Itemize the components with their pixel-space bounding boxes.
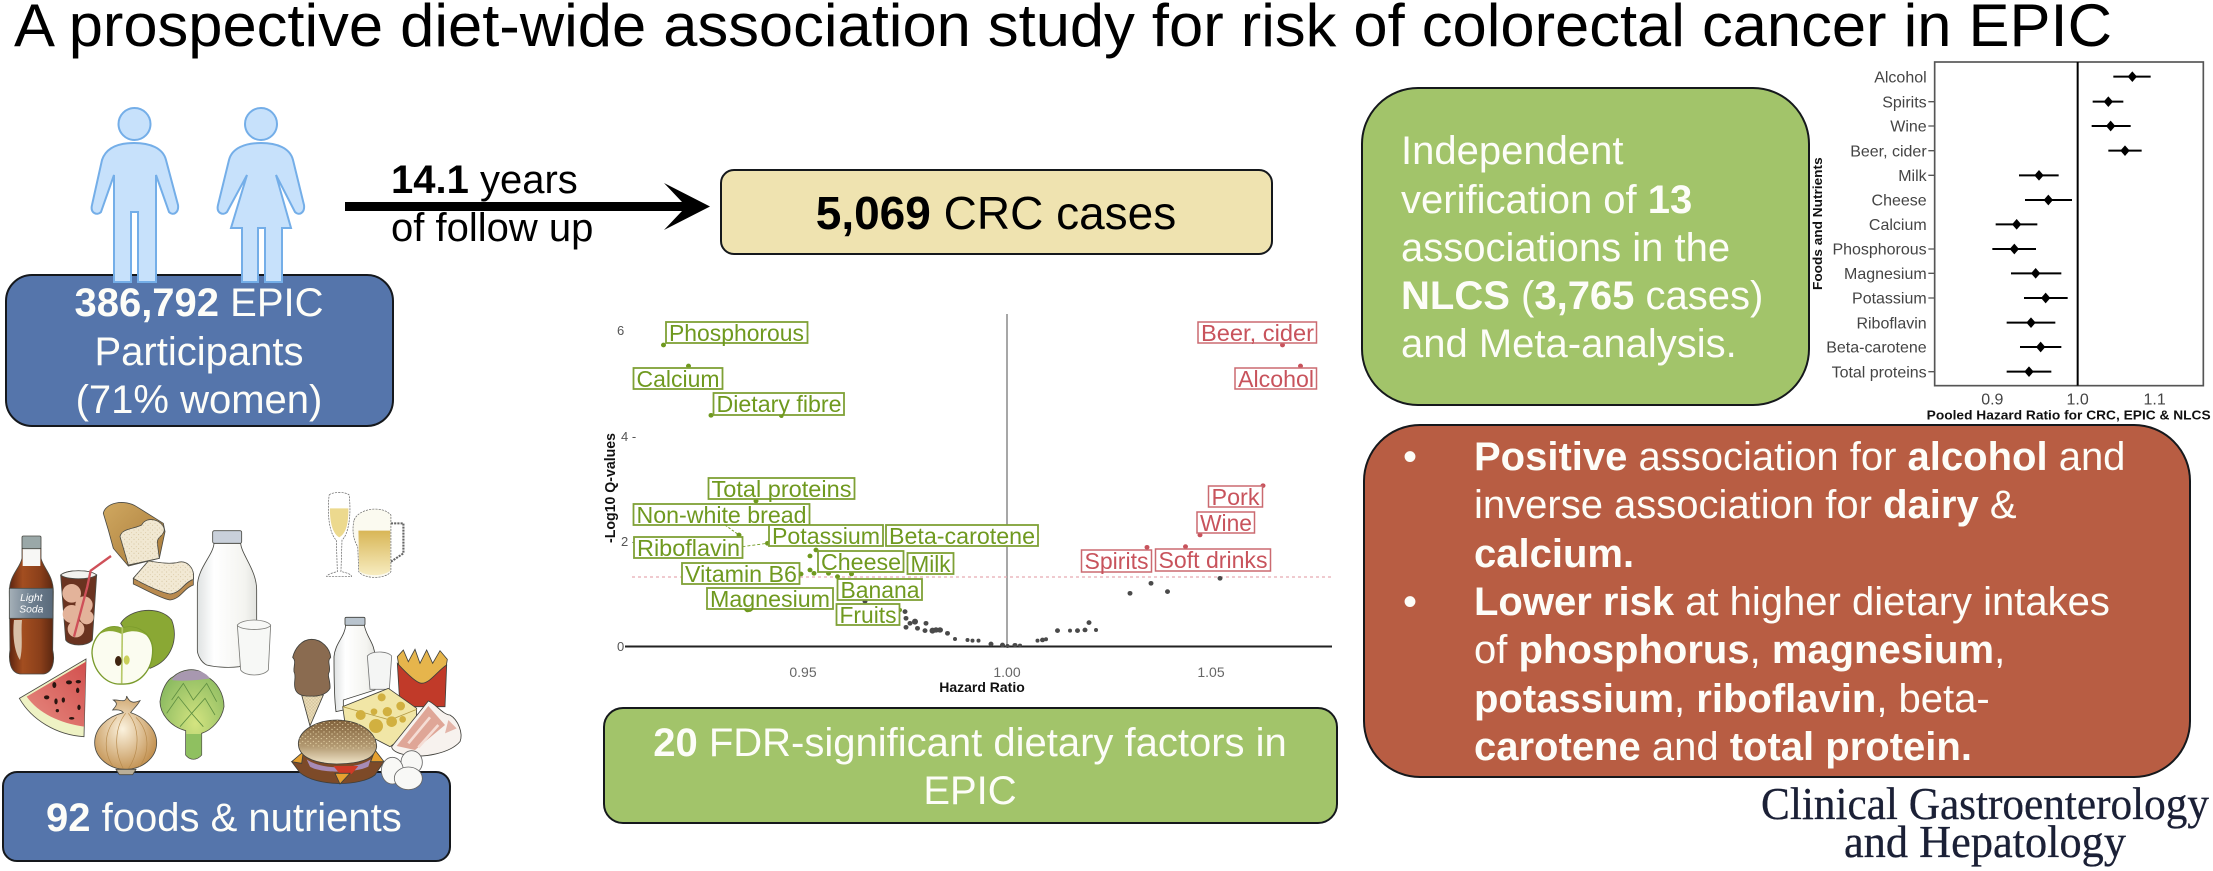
bullet: lower risk: • bbox=[1403, 580, 1417, 624]
icon: cheese bbox=[343, 688, 417, 747]
bullet: lower risk: Lower risk at higher dietary intakes bbox=[1474, 580, 2110, 624]
x-axis ticks bbox=[1981, 392, 2166, 409]
icon: fries bbox=[397, 649, 447, 707]
estimates with confidence intervals bbox=[1992, 71, 2151, 377]
labels: inverse associations: Cheese bbox=[821, 549, 901, 575]
panel: 20 FDR-significant dietary factors bbox=[604, 708, 1337, 823]
icon: beer mug bbox=[353, 509, 403, 577]
icon: ice cream bbox=[293, 639, 331, 726]
labels: inverse associations: Beta-carotene bbox=[889, 523, 1035, 549]
x-axis ticks: 1.00 bbox=[993, 664, 1021, 680]
labels: positive associations: Beer, cider bbox=[1201, 320, 1314, 346]
row ticks bbox=[1928, 102, 1935, 372]
y-axis title: Foods and Nutrients bbox=[1810, 157, 1825, 290]
panel: independent verification: associations in the bbox=[1401, 226, 1730, 270]
panel: EPIC participants: Participants bbox=[95, 330, 303, 374]
y-axis ticks bbox=[617, 323, 636, 654]
labels: positive associations: Alcohol bbox=[1238, 366, 1314, 392]
row labels: Milk bbox=[1898, 168, 1928, 185]
x-axis title: Hazard Ratio bbox=[939, 679, 1025, 695]
row labels: Cheese bbox=[1872, 193, 1927, 210]
row labels: Alcohol bbox=[1874, 69, 1927, 86]
row labels: Potassium bbox=[1852, 291, 1927, 308]
axis lines bbox=[625, 314, 1332, 646]
bullet: alcohol and dairy: Positive association for alcohol and bbox=[1474, 435, 2125, 479]
x-axis title: Pooled Hazard Ratio for CRC, EPIC & NLCS bbox=[1927, 407, 2211, 422]
journal name bbox=[1761, 778, 2209, 867]
text: years of follow up: of follow up bbox=[391, 206, 593, 250]
labels: positive associations: Spirits bbox=[1084, 548, 1148, 574]
labels: inverse associations bbox=[634, 320, 1038, 628]
icon: light soda bottle bbox=[9, 536, 54, 674]
icon: artichoke bbox=[160, 670, 224, 759]
panel: independent verification bbox=[1362, 88, 1809, 405]
labels: inverse associations: Phosphorous bbox=[669, 320, 804, 346]
bullet: lower risk: potassium, riboflavin, beta- bbox=[1474, 677, 1990, 721]
chart: forest plot bbox=[1810, 62, 2211, 422]
y-axis title: -Log10 Q-values bbox=[603, 433, 619, 543]
row labels: Total proteins bbox=[1832, 364, 1927, 381]
icon: bread bbox=[103, 502, 194, 600]
icon: onion bbox=[95, 696, 157, 775]
x-axis ticks: 1.05 bbox=[1197, 664, 1225, 680]
row labels: Wine bbox=[1890, 119, 1927, 136]
labels: inverse associations: Magnesium bbox=[710, 586, 830, 612]
labels: inverse associations: Potassium bbox=[772, 523, 880, 549]
panel: EPIC participants: 386,792 EPIC bbox=[74, 281, 324, 325]
y-axis ticks: 6 bbox=[617, 323, 624, 338]
y-axis ticks: 2 - bbox=[621, 534, 636, 549]
icon: green apple bbox=[92, 610, 174, 684]
panel: independent verification: Independent bbox=[1401, 129, 1623, 173]
bullet: alcohol and dairy: calcium. bbox=[1474, 532, 1634, 576]
icon: milk bottle bbox=[197, 531, 271, 675]
bullet: lower risk bbox=[1403, 580, 2110, 769]
plot frame bbox=[1935, 62, 2203, 386]
panel: 92 foods and nutrients: 92 foods & nutrients bbox=[46, 796, 402, 840]
journal name: and Hepatology bbox=[1844, 816, 2126, 867]
row labels: Calcium bbox=[1869, 217, 1927, 234]
row labels: Beer, cider bbox=[1850, 143, 1927, 160]
x-axis ticks: 0.9 bbox=[1981, 392, 2004, 409]
panel: key findings bbox=[1364, 425, 2190, 777]
bullet: alcohol and dairy: inverse association for dairy & bbox=[1474, 483, 2017, 527]
significant positive points bbox=[1144, 343, 1303, 550]
x-axis ticks: 0.95 bbox=[789, 664, 817, 680]
labels: inverse associations: Non-white bread bbox=[636, 502, 806, 528]
chart: volcano plot bbox=[603, 314, 1332, 695]
icon: woman bbox=[218, 108, 304, 282]
icon: iced drink bbox=[61, 556, 111, 645]
y-axis ticks: 4 - bbox=[621, 429, 636, 444]
labels: positive associations: Wine bbox=[1200, 510, 1252, 536]
icon: watermelon bbox=[19, 659, 86, 737]
row labels bbox=[1826, 69, 1928, 381]
significant inverse points bbox=[661, 343, 902, 612]
panel: independent verification: verification of 13 bbox=[1401, 178, 1692, 222]
y-axis ticks: 0 bbox=[617, 639, 624, 654]
bullet: lower risk: carotene and total protein. bbox=[1474, 725, 1972, 769]
icon: man bbox=[92, 108, 178, 282]
bullet: alcohol and dairy: • bbox=[1403, 435, 1417, 479]
icon: light soda bottle: Light bbox=[20, 593, 44, 604]
row labels: Phosphorous bbox=[1832, 242, 1927, 259]
bullet: alcohol and dairy bbox=[1403, 435, 2125, 576]
labels: inverse associations: Vitamin B6 bbox=[685, 561, 797, 587]
icon: eggs bbox=[381, 751, 422, 790]
row labels: Riboflavin bbox=[1856, 315, 1927, 332]
icon: milk bottle small bbox=[334, 617, 392, 712]
icon: champagne flute bbox=[327, 492, 352, 577]
panel: CRC cases: 5,069 CRC cases bbox=[816, 187, 1176, 239]
panel: 20 FDR-significant dietary factors: EPIC bbox=[923, 769, 1017, 813]
labels: positive associations: Pork bbox=[1212, 484, 1260, 510]
row labels: Beta-carotene bbox=[1826, 340, 1927, 357]
arrow: follow up bbox=[345, 183, 710, 230]
icon: meat bbox=[392, 701, 461, 756]
x-axis ticks bbox=[789, 664, 1225, 680]
labels: inverse associations: Dietary fibre bbox=[716, 391, 842, 417]
labels: inverse associations: Riboflavin bbox=[637, 535, 740, 561]
icon: burger bbox=[292, 720, 384, 784]
row labels: Spirits bbox=[1882, 94, 1927, 111]
labels: inverse associations: Calcium bbox=[636, 366, 720, 392]
icon: light soda bottle: Soda bbox=[19, 605, 44, 616]
x-axis ticks: 1.0 bbox=[2067, 392, 2089, 409]
icon group: high-fat foods illustration bbox=[292, 617, 461, 790]
text: years of follow up: 14.1 years bbox=[391, 158, 578, 202]
row labels: Magnesium bbox=[1844, 266, 1927, 283]
icon group: healthy foods illustration bbox=[9, 502, 271, 775]
icon group: wine and beer bbox=[327, 492, 403, 577]
panel: EPIC participants bbox=[6, 275, 393, 426]
panel: independent verification: NLCS (3,765 cases) bbox=[1401, 274, 1763, 318]
labels: inverse associations: Fruits bbox=[840, 602, 896, 628]
panel: CRC cases bbox=[721, 170, 1272, 254]
labels: inverse associations: Milk bbox=[910, 551, 951, 577]
labels: positive associations: Soft drinks bbox=[1158, 547, 1268, 573]
x-axis ticks: 1.1 bbox=[2144, 392, 2166, 409]
panel: 92 foods and nutrients bbox=[3, 772, 450, 861]
labels: inverse associations: Banana bbox=[840, 577, 920, 603]
bullet: lower risk: of phosphorus, magnesium, bbox=[1474, 628, 2005, 672]
labels: inverse associations: Total proteins bbox=[712, 476, 852, 502]
text: years of follow up bbox=[391, 158, 593, 250]
panel: independent verification: and Meta-analysis. bbox=[1401, 322, 1737, 366]
panel: 20 FDR-significant dietary factors: 20 FDR-significant dietary factors in bbox=[653, 721, 1287, 765]
labels: positive associations bbox=[1082, 320, 1316, 574]
non-significant points bbox=[862, 576, 1222, 648]
reference line bbox=[2075, 62, 2081, 386]
panel: EPIC participants: (71% women) bbox=[76, 378, 322, 422]
